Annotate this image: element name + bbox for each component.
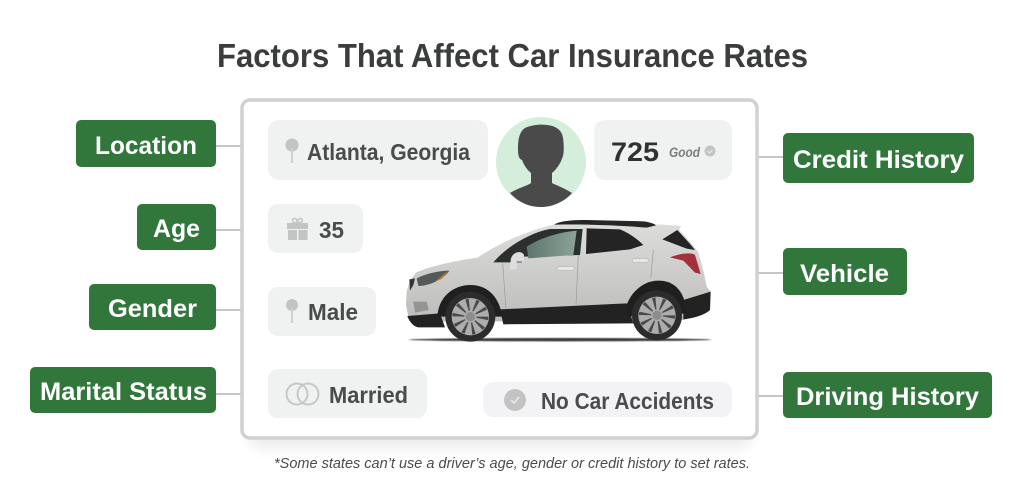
- footnote: *Some states can’t use a driver’s age, gender or credit history to set rates.: [274, 456, 750, 472]
- label: Credit History: Credit History: [793, 146, 964, 174]
- wheel arches: [437, 285, 502, 317]
- roof rail: [554, 220, 656, 228]
- label: Marital Status: Marital Status: [40, 378, 207, 406]
- gender field: [268, 287, 376, 336]
- rear bumper: [683, 292, 711, 319]
- location field: Atlanta, Georgia: [307, 139, 470, 165]
- credit score field: Good: [669, 144, 700, 160]
- label: Vehicle: Vehicle: [800, 260, 889, 288]
- age field: [268, 204, 363, 253]
- connector lines: [216, 146, 783, 396]
- tail light: [670, 253, 701, 274]
- label: Age: [137, 204, 216, 250]
- driving history field: [483, 382, 732, 417]
- label: Marital Status: [30, 367, 216, 413]
- driving history field: No Car Accidents: [541, 388, 714, 414]
- mirror: [510, 252, 524, 269]
- shadow: [408, 338, 712, 341]
- marital status field: [268, 369, 427, 418]
- icon: pin: [286, 299, 298, 323]
- avatar: [496, 117, 586, 207]
- title: Factors That Affect Car Insurance Rates: [217, 37, 808, 74]
- location field: [268, 120, 488, 180]
- credit score field: [594, 120, 732, 180]
- card shadow: [250, 120, 750, 448]
- icon: rings: [286, 384, 318, 404]
- icon: location pin: [286, 138, 298, 163]
- icon: small check: [704, 146, 716, 156]
- label: Location: [76, 120, 216, 167]
- door seams and handles: [503, 250, 653, 309]
- label: Location: Location: [95, 132, 197, 160]
- rear window: [586, 228, 643, 254]
- label: Vehicle: [783, 248, 907, 295]
- headlight: [417, 271, 449, 286]
- label: Gender: Gender: [108, 295, 197, 323]
- quarter window: [662, 230, 695, 250]
- front wheel: [445, 292, 495, 342]
- gender field: Male: [308, 299, 358, 325]
- grille: [409, 278, 415, 291]
- icon: check: [504, 389, 526, 411]
- icon: gift: [287, 218, 308, 240]
- panel: profile card: [242, 100, 757, 438]
- label: Gender: [89, 284, 216, 330]
- car image: [406, 220, 712, 342]
- rear wheel: [632, 290, 682, 340]
- front bumper: [407, 313, 445, 327]
- label: Credit History: [783, 133, 974, 183]
- front window: [493, 229, 583, 262]
- age field: 35: [319, 217, 344, 243]
- body: [406, 225, 711, 322]
- label: Age: Age: [153, 215, 200, 243]
- label: Driving History: Driving History: [796, 383, 979, 411]
- credit score field: 725: [611, 137, 659, 167]
- rocker: [500, 303, 633, 324]
- label: Driving History: [783, 372, 992, 418]
- marital status field: Married: [329, 382, 408, 408]
